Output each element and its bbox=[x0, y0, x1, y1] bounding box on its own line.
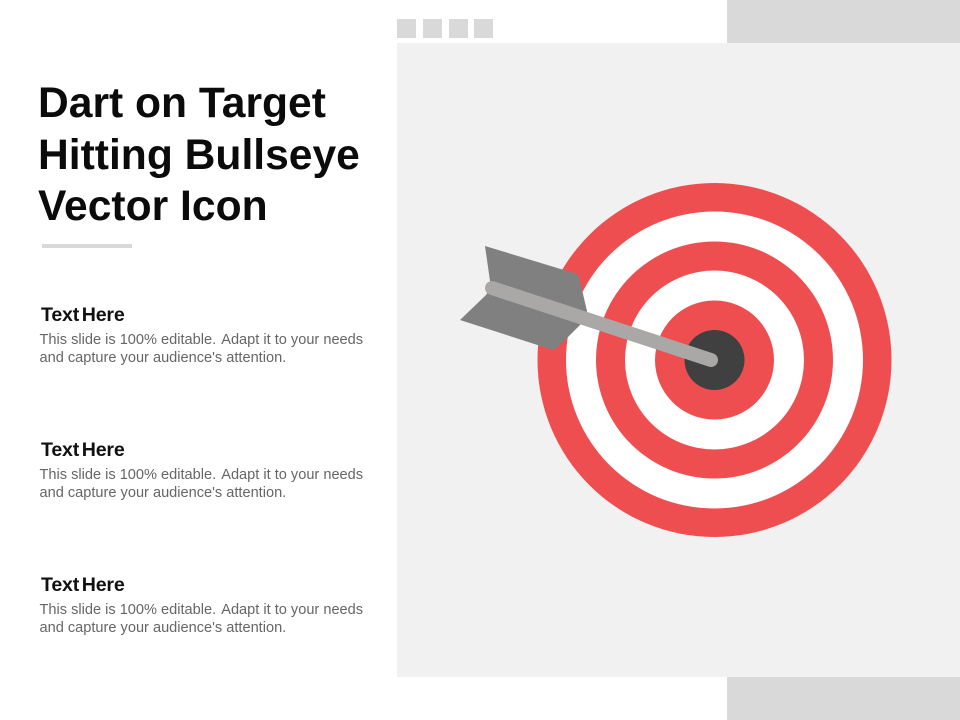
body 1: and capture your audience's attention. bbox=[40, 350, 286, 366]
text block 1 bbox=[40, 304, 363, 366]
body 1 bbox=[40, 332, 363, 366]
target rings bbox=[538, 183, 892, 537]
title: Vector Icon bbox=[38, 182, 268, 230]
title: Hitting Bullseye bbox=[38, 130, 360, 178]
top right grey block bbox=[727, 0, 960, 43]
body 2: This slide is 100% editable. Adapt it to your needs bbox=[40, 467, 363, 483]
bottom right grey block bbox=[727, 677, 960, 720]
body 1: This slide is 100% editable. Adapt it to your needs bbox=[40, 332, 363, 348]
body 3 bbox=[40, 602, 363, 636]
dart bbox=[460, 246, 711, 360]
heading 1: Text Here bbox=[41, 304, 125, 326]
shaft bbox=[492, 288, 711, 360]
four small grey squares bbox=[397, 19, 493, 38]
title: Dart on Target bbox=[38, 79, 326, 127]
upper fletching bbox=[485, 246, 587, 319]
panel: target background bbox=[397, 43, 960, 677]
title bbox=[38, 79, 360, 230]
heading 3: Text Here bbox=[41, 574, 125, 596]
text block 3 bbox=[40, 574, 363, 636]
title underline bbox=[42, 244, 132, 248]
body 2 bbox=[40, 467, 363, 501]
text block 2 bbox=[40, 438, 363, 501]
body 3: This slide is 100% editable. Adapt it to your needs bbox=[40, 602, 363, 618]
lower fletching bbox=[460, 288, 585, 350]
heading 2: Text Here bbox=[41, 438, 125, 460]
body 2: and capture your audience's attention. bbox=[40, 485, 286, 501]
body 3: and capture your audience's attention. bbox=[40, 620, 286, 636]
